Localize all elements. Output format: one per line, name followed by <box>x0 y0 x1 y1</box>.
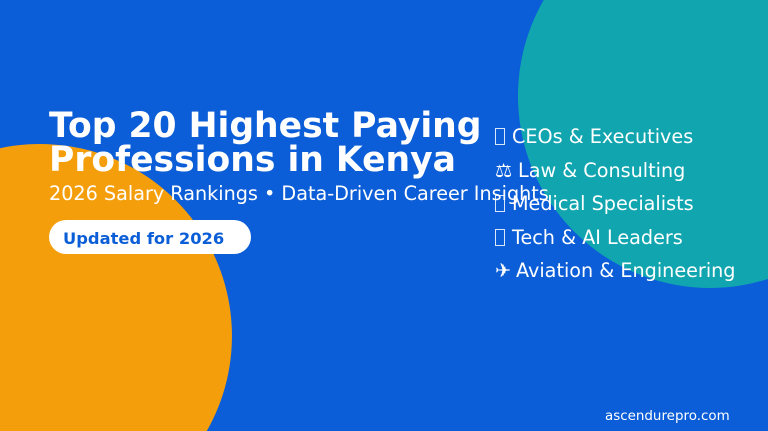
list item: law: ⚖︎ <box>495 159 512 182</box>
list item: aviation: Aviation & Engineering <box>516 259 736 282</box>
website footer: ascendurepro.com <box>605 409 730 424</box>
list item: tech: Tech & AI Leaders <box>512 226 683 249</box>
badge: updated for 2026: Updated for 2026 <box>63 229 224 248</box>
list item: law: Law & Consulting <box>518 159 685 182</box>
title: Top 20 Highest Paying <box>49 106 482 146</box>
subtitle: 2026 Salary Rankings • Data-Driven Career Insights <box>49 182 549 205</box>
title <box>49 106 482 180</box>
list item: CEOs: CEOs & Executives <box>512 125 693 148</box>
badge: updated for 2026 <box>49 220 251 254</box>
list item: medical: Medical Specialists <box>512 192 694 215</box>
list item: aviation: ✈︎ <box>495 259 511 282</box>
title: Professions in Kenya <box>49 140 456 180</box>
